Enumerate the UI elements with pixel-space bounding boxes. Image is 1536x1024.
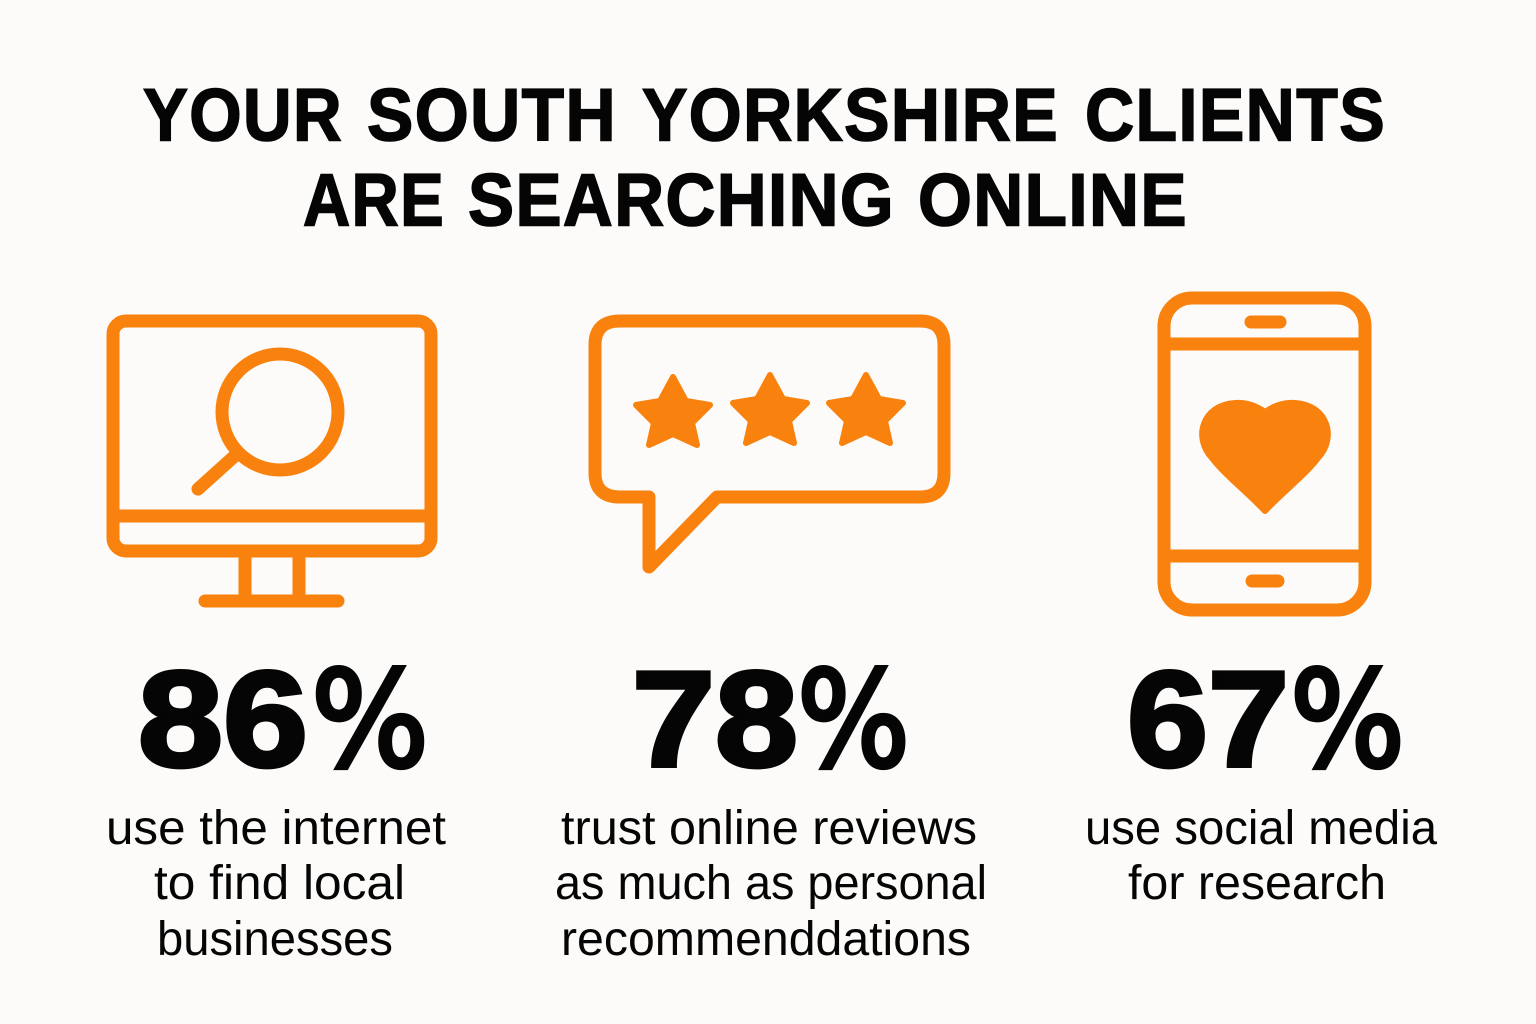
statistic: 67% — [1127, 643, 1405, 798]
icon: speech bubble with stars — [595, 321, 944, 567]
statistic: 86%: 86 — [138, 643, 308, 795]
statistic: 78%: 78 — [632, 643, 798, 795]
description: online reviews — [555, 802, 987, 966]
title: CLIENTS — [1085, 74, 1386, 156]
description: internet use: businesses — [157, 913, 393, 966]
title: ARE — [303, 158, 445, 242]
title: YOUR — [143, 74, 343, 156]
title: SOUTH — [367, 74, 617, 156]
description: social media: for research — [1128, 857, 1386, 910]
statistic: 67%: 67 — [1127, 643, 1289, 795]
title: SEARCHING — [468, 158, 895, 242]
icon: smartphone with heart — [1164, 298, 1365, 610]
description: online reviews: trust online reviews — [561, 802, 977, 855]
title: YORKSHIRE — [642, 74, 1059, 156]
statistic: 78%: % — [797, 644, 910, 798]
description: online reviews: recommenddations — [561, 913, 971, 966]
title: ONLINE — [918, 158, 1188, 242]
description: internet use: use the internet — [106, 802, 446, 855]
description: social media — [1085, 802, 1437, 910]
description: internet use — [106, 802, 446, 966]
description: internet use: to find local — [154, 857, 405, 910]
description: online reviews: as much as personal — [555, 857, 987, 910]
statistic: 86% — [138, 643, 429, 798]
panel: internet statistic — [106, 321, 446, 966]
panel: social media statistic — [1085, 298, 1437, 910]
statistic: 67%: % — [1290, 644, 1405, 798]
statistic: 78% — [632, 643, 910, 798]
panel: reviews statistic — [555, 321, 987, 966]
statistic: 86%: % — [311, 644, 429, 798]
icon: desktop monitor with magnifying glass — [113, 321, 431, 601]
description: social media: use social media — [1085, 802, 1437, 855]
title — [143, 74, 1386, 242]
